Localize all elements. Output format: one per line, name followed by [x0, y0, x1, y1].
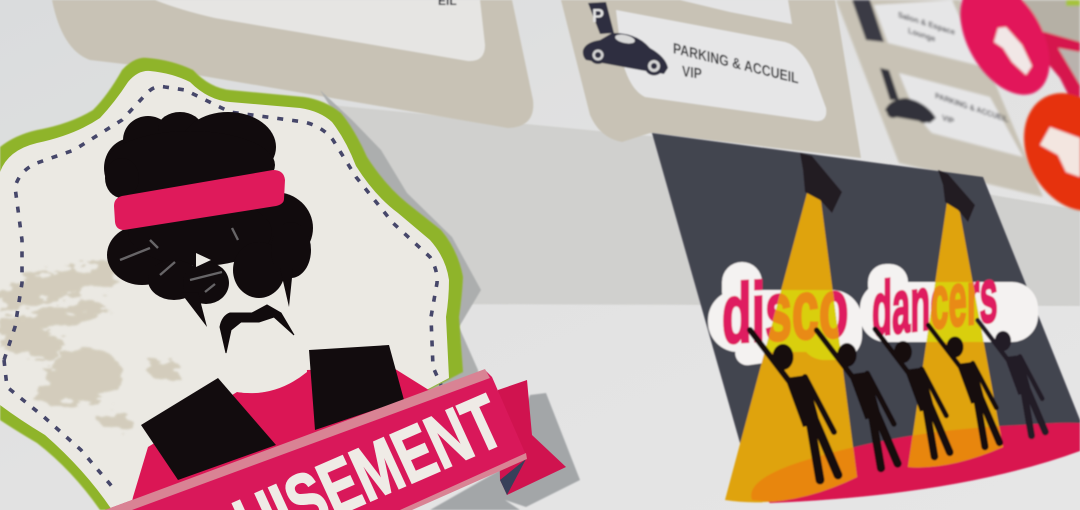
dashed stitching lower — [4, 360, 115, 490]
ribbon band — [105, 370, 526, 510]
white label bottom — [899, 73, 1023, 157]
title text: disco — [722, 261, 848, 361]
poster background — [652, 133, 1080, 480]
panel: disco dancers poster — [652, 133, 1080, 510]
ribbon — [105, 369, 580, 510]
ribbon shadow — [430, 393, 580, 510]
badge green border — [0, 58, 463, 510]
text: small blurred labels: PARKING & ACCUEIL — [935, 91, 1009, 125]
green corner — [1066, 0, 1080, 6]
ribbon top stripe — [105, 369, 490, 510]
icon: parking sign and car: P — [592, 6, 604, 26]
panel: beige parking card right — [836, 0, 1043, 197]
panel: beige parking card centre — [561, 0, 861, 158]
text: small blurred labels: Salon & Espace — [898, 10, 955, 37]
title cloud — [708, 262, 1038, 367]
dashed stitching — [4, 87, 441, 385]
title text — [722, 253, 998, 361]
spotlight cones — [725, 193, 1003, 502]
icon: lower car — [880, 68, 936, 123]
portrait black square right — [309, 345, 404, 430]
portrait neck cut — [225, 345, 307, 393]
badge cream face — [0, 71, 449, 510]
spotlight over title: dancers — [872, 253, 998, 353]
icon: red circle — [1004, 76, 1080, 228]
badge shadow — [320, 90, 481, 395]
text: parking VIP: VIP — [682, 63, 702, 82]
corner stickers — [942, 0, 1080, 228]
text: small blurred labels: Lounge — [908, 26, 936, 44]
dancers — [750, 320, 1045, 480]
title text: dancers — [872, 253, 998, 353]
white label upper fragment — [680, 0, 792, 24]
text: small blurred labels: VIP — [942, 113, 955, 126]
background grey band — [320, 104, 1080, 306]
dance floor — [760, 423, 1080, 503]
panel: badge with portrait — [0, 58, 481, 510]
portrait headband — [114, 170, 285, 230]
grey corner backing — [1000, 0, 1080, 60]
ribbon tail fold — [500, 459, 526, 495]
panel: beige info card left — [52, 0, 533, 128]
white label top — [874, 0, 981, 66]
icon: pink circle — [942, 0, 1068, 110]
portrait moustache — [220, 305, 294, 353]
text: small blurred labels — [898, 10, 1009, 126]
ribbon tail — [498, 380, 566, 495]
pink ribbon — [1020, 30, 1080, 118]
portrait hair — [104, 112, 313, 327]
spotlight over title — [751, 281, 1003, 502]
spotlight over title: disco — [722, 261, 848, 361]
sticker detail — [1058, 48, 1080, 85]
icon: upper car — [852, 0, 884, 42]
distressed texture — [0, 262, 181, 429]
portrait shirt — [130, 367, 432, 510]
icon: parking sign and car — [583, 2, 668, 76]
portrait black square left — [141, 378, 276, 480]
text: parking VIP: PARKING & ACCUEIL — [673, 39, 799, 87]
white label parking — [616, 10, 826, 121]
stage lamps — [800, 153, 975, 222]
ribbon bottom stripe — [400, 453, 527, 510]
